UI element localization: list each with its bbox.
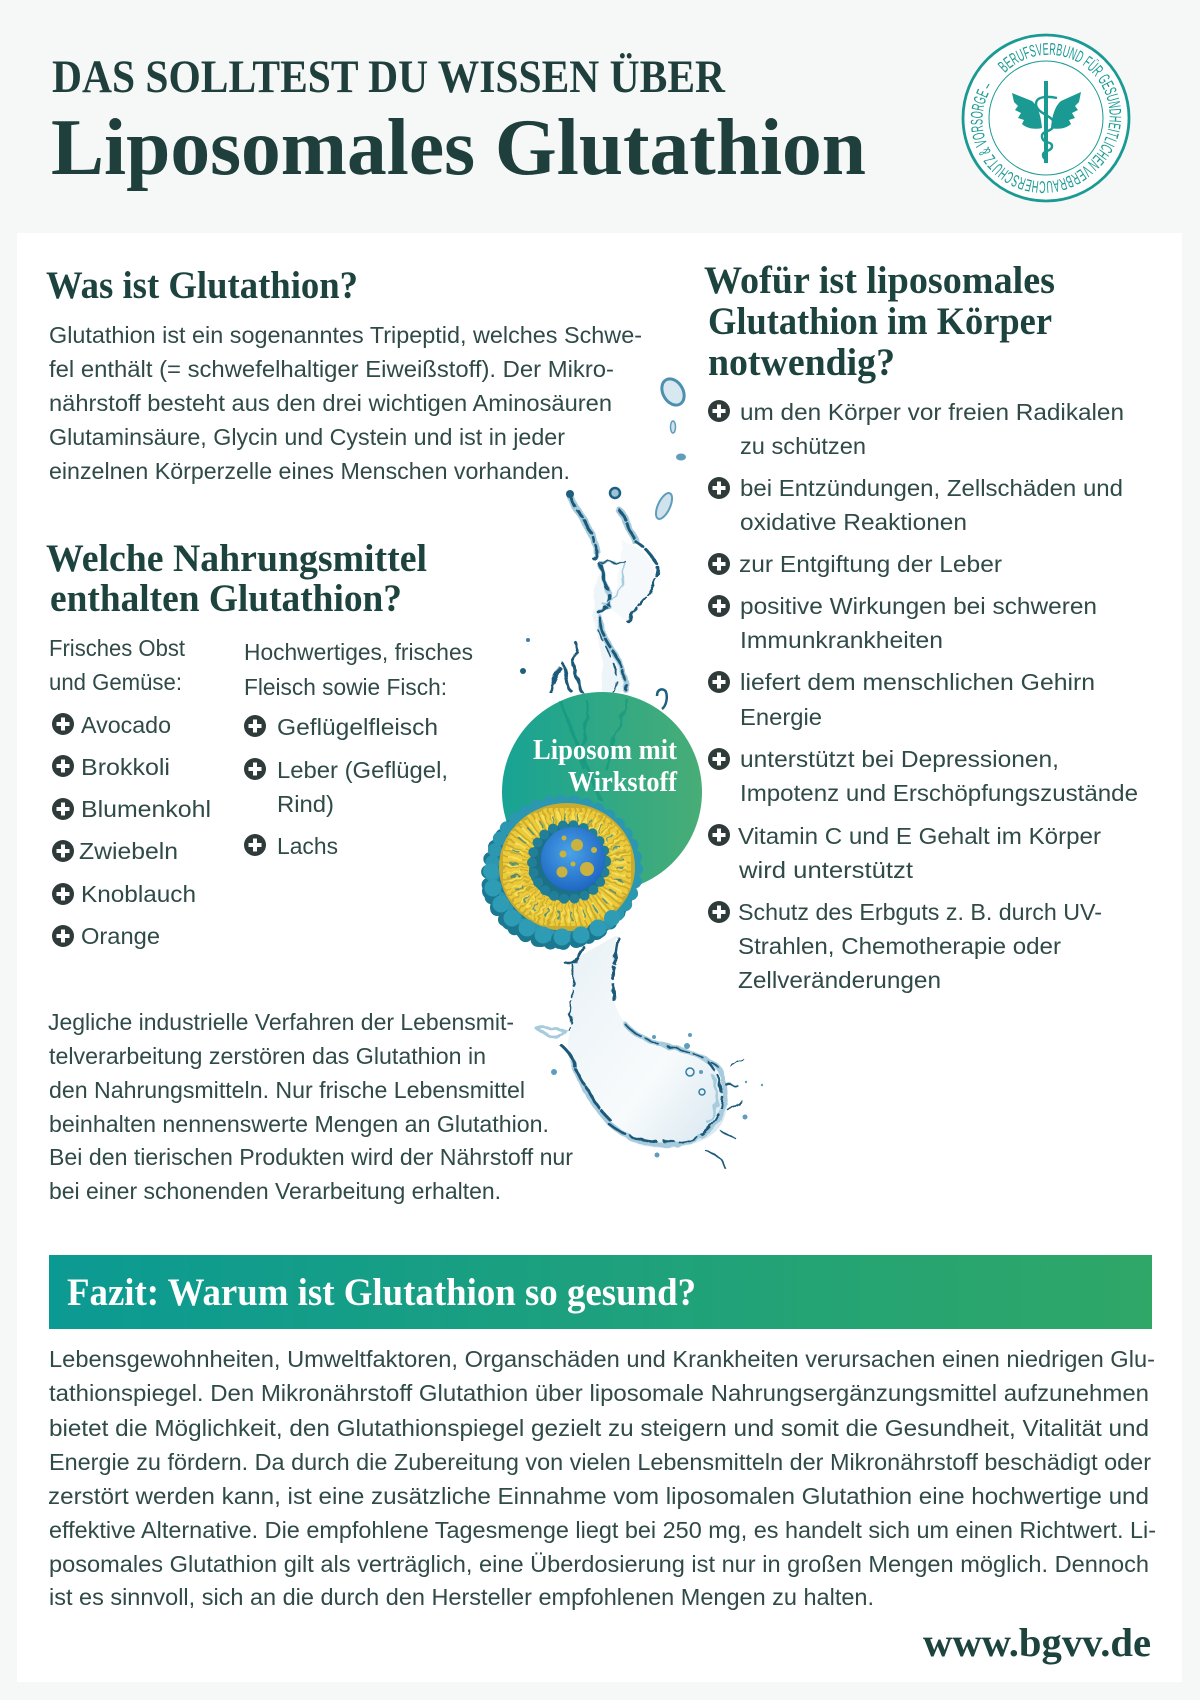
paragraph: Fazit text	[48, 1346, 1156, 1610]
logo badge: BERUFSVERBUND FÜR GESUNDHEITLICHEN VERBRAUCHERSCHUTZ & VORSORGE –	[970, 43, 1122, 194]
title: Liposomales Glutathion	[51, 104, 866, 192]
green circle with label: Liposom mit	[533, 735, 678, 766]
banner: Fazit	[49, 1255, 1152, 1329]
water splash: top	[520, 375, 689, 709]
list: Obst und Gemüse: Blumenkohl	[81, 796, 211, 822]
paragraph: definition: Glutathion ist ein sogenanntes Tripeptid, welches Schwe-	[49, 322, 642, 348]
section: Wofür notwendig	[704, 259, 1138, 993]
list: Obst und Gemüse: Frisches Obst	[49, 635, 186, 661]
section: Nahrungsmittel: enthalten Glutathion?	[50, 577, 402, 620]
green circle with label	[502, 692, 702, 892]
paragraph: definition	[49, 322, 642, 484]
title: DAS SOLLTEST DU WISSEN ÜBER	[52, 51, 726, 103]
paragraph: definition: Glutaminsäure, Glycin und Cystein und ist in jeder	[49, 424, 565, 450]
list: Wirkungen: bei Entzündungen, Zellschäden und	[740, 475, 1123, 501]
list: Fleisch und Fisch: Leber (Geflügel,	[277, 757, 448, 783]
section: Wofür notwendig: Glutathion im Körper	[708, 300, 1052, 343]
section: Wofür notwendig: notwendig?	[708, 341, 895, 384]
list: Wirkungen: zur Entgiftung der Leber	[739, 551, 1002, 577]
paragraph: Fazit text: tathionspiegel. Den Mikronährstoff Glutathion über liposomale Nahrungsergänzungsmittel aufzunehmen	[49, 1380, 1149, 1406]
list: Obst und Gemüse: Brokkoli	[81, 754, 170, 780]
list: Wirkungen: zu schützen	[740, 433, 866, 459]
paragraph: Verarbeitung: Bei den tierischen Produkten wird der Nährstoff nur	[49, 1144, 573, 1170]
list: Wirkungen: Schutz des Erbguts z. B. durch UV-	[738, 899, 1102, 925]
list: Wirkungen: oxidative Reaktionen	[740, 509, 967, 535]
list: Obst und Gemüse: Zwiebeln	[79, 838, 178, 864]
section: Wofür notwendig: Wofür ist liposomales	[704, 259, 1055, 302]
paragraph: Fazit text: Energie zu fördern. Da durch die Zubereitung von vielen Lebensmitteln der Mikronährstoff beschädigt oder	[49, 1449, 1151, 1475]
list: Wirkungen: liefert dem menschlichen Gehirn	[740, 669, 1095, 695]
paragraph: definition: fel enthält (= schwefelhaltiger Eiweißstoff). Der Mikro-	[49, 356, 614, 382]
list: Wirkungen: Vitamin C und E Gehalt im Körper	[738, 823, 1101, 849]
paragraph: Verarbeitung	[48, 1009, 573, 1204]
section: Was ist Glutathion: Was ist Glutathion?	[46, 264, 358, 307]
section: Was ist Glutathion	[46, 264, 642, 484]
paragraph: Fazit text: posomales Glutathion gilt als verträglich, eine Überdosierung ist nur in großen Mengen möglich. Dennoch	[49, 1551, 1149, 1577]
water splash: bottom	[536, 935, 763, 1168]
paragraph: Verarbeitung: Jegliche industrielle Verfahren der Lebensmit-	[48, 1009, 514, 1035]
paragraph: Verarbeitung: bei einer schonenden Verarbeitung erhalten.	[49, 1178, 501, 1204]
list: Fleisch und Fisch: Lachs	[277, 833, 338, 859]
list: Wirkungen: Energie	[740, 704, 822, 730]
liposome	[482, 801, 638, 949]
list: Fleisch und Fisch: Geflügelfleisch	[277, 714, 438, 740]
website url: www.bgvv.de	[923, 1620, 1151, 1665]
paragraph: definition: einzelnen Körperzelle eines Menschen vorhanden.	[49, 458, 570, 484]
paragraph: Verarbeitung: telverarbeitung zerstören das Glutathion in	[49, 1043, 486, 1069]
list: Wirkungen: unterstützt bei Depressionen,	[740, 746, 1059, 772]
water droplets	[520, 375, 689, 709]
list: Fleisch und Fisch	[244, 639, 473, 859]
list: Wirkungen: Immunkrankheiten	[740, 627, 943, 653]
paragraph: Verarbeitung: den Nahrungsmitteln. Nur frische Lebensmittel	[49, 1077, 525, 1103]
list: Obst und Gemüse: und Gemüse:	[49, 669, 182, 695]
paragraph: Verarbeitung: beinhalten nennenswerte Mengen an Glutathion.	[49, 1111, 549, 1137]
list: Fleisch und Fisch: Hochwertiges, frisches	[244, 639, 473, 665]
paragraph: definition: nährstoff besteht aus den drei wichtigen Aminosäuren	[49, 390, 612, 416]
section: Nahrungsmittel: Welche Nahrungsmittel	[46, 537, 427, 580]
list: Wirkungen: wird unterstützt	[738, 857, 914, 883]
list: Fleisch und Fisch: Rind)	[277, 791, 334, 817]
list: Wirkungen: um den Körper vor freien Radikalen	[740, 399, 1124, 425]
list: Wirkungen: positive Wirkungen bei schweren	[740, 593, 1097, 619]
title	[51, 51, 866, 192]
list: Fleisch und Fisch: Fleisch sowie Fisch:	[244, 674, 447, 700]
section: Nahrungsmittel	[46, 537, 473, 949]
paragraph: Fazit text: Lebensgewohnheiten, Umweltfaktoren, Organschäden und Krankheiten verursachen einen niedrigen Glu-	[49, 1346, 1155, 1372]
list: Wirkungen: Strahlen, Chemotherapie oder	[738, 933, 1061, 959]
banner: Fazit: Fazit: Warum ist Glutathion so gesund?	[67, 1271, 696, 1314]
list: Obst und Gemüse: Knoblauch	[81, 881, 196, 907]
list: Wirkungen: Impotenz und Erschöpfungszustände	[740, 780, 1138, 806]
list: Obst und Gemüse: Avocado	[81, 712, 171, 738]
list: Obst und Gemüse: Orange	[81, 923, 160, 949]
list: Obst und Gemüse	[49, 635, 211, 949]
list: Wirkungen: Zellveränderungen	[738, 967, 941, 993]
green circle with label: Wirkstoff	[568, 767, 678, 798]
list: Wirkungen	[708, 399, 1138, 993]
paragraph: Fazit text: bietet die Möglichkeit, den Glutathionspiegel gezielt zu steigern und somit die Gesundheit, Vitalität und	[49, 1415, 1149, 1441]
paragraph: Fazit text: effektive Alternative. Die empfohlene Tagesmenge liegt bei 250 mg, es handelt sich um einen Richtwert. Li-	[49, 1517, 1156, 1543]
paragraph: Fazit text: zerstört werden kann, ist eine zusätzliche Einnahme vom liposomalen Glutathion eine hochwertige und	[48, 1483, 1149, 1509]
splash droplets	[551, 1033, 763, 1158]
paragraph: Fazit text: ist es sinnvoll, sich an die durch den Hersteller empfohlenen Mengen zu halten.	[49, 1584, 874, 1610]
